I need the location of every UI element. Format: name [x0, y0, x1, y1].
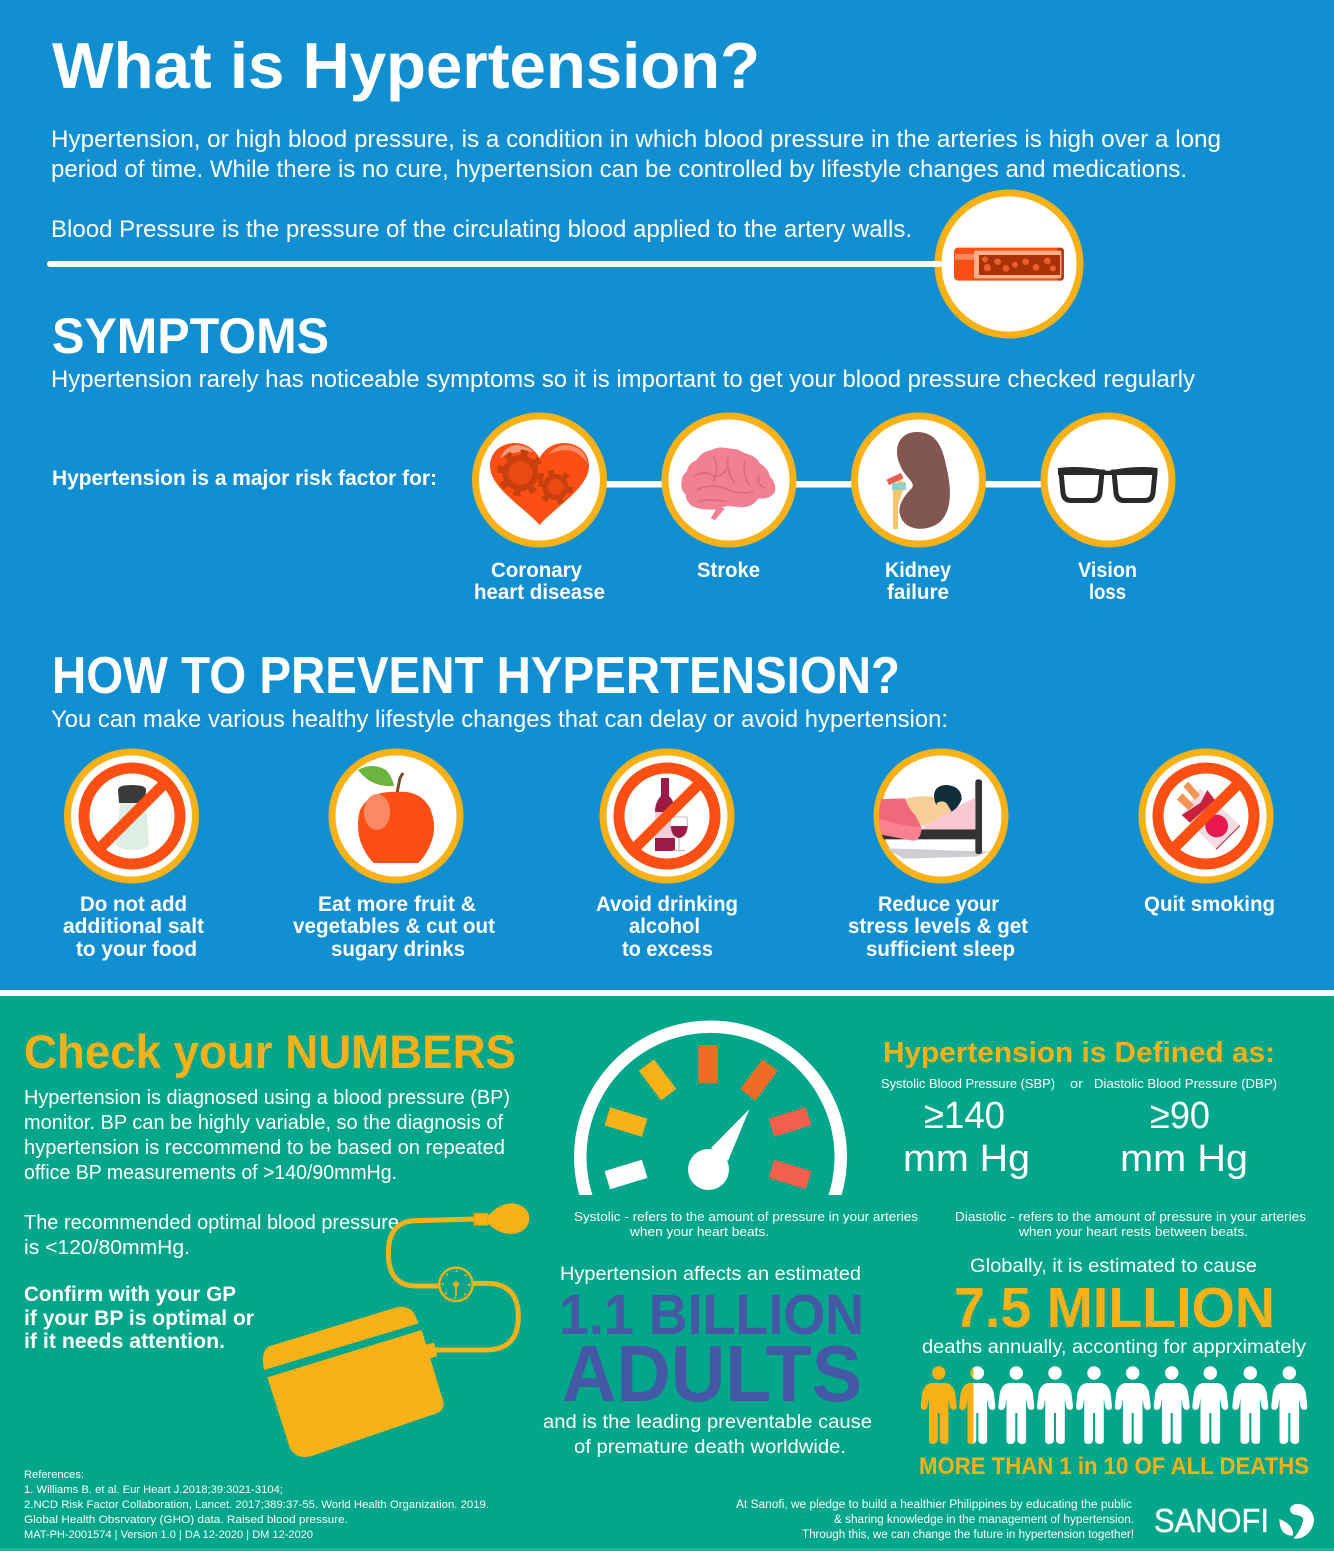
text: Sanofi pledge: & sharing knowledge in the management of hypertension.	[834, 1514, 1134, 1526]
text: Sanofi pledge: At Sanofi, we pledge to build a healthier Philippines by educating the public	[736, 1499, 1132, 1511]
labels: prevention tips: stress levels & get	[848, 915, 1028, 938]
definition values: Systolic Blood Pressure (SBP)	[881, 1077, 1055, 1091]
heading: defined as: Hypertension is Defined as:	[883, 1037, 1275, 1069]
text: diastolic description: Diastolic - refers to the amount of pressure in your arteries	[955, 1209, 1307, 1224]
definition values: mm Hg	[903, 1138, 1030, 1180]
text block: definition	[51, 126, 1221, 243]
panel: check your numbers	[0, 996, 1334, 1551]
labels: risk factors: Coronary	[491, 559, 582, 582]
references	[24, 1469, 489, 1541]
labels: prevention tips: Eat more fruit &	[318, 893, 476, 916]
definition values: Diastolic Blood Pressure (DBP)	[1094, 1077, 1277, 1091]
labels: risk factors: heart disease	[474, 581, 605, 604]
icon: sleep	[877, 752, 1005, 880]
references: Global Health Obsrvatory (GHO) data. Raised blood pressure.	[24, 1514, 348, 1526]
definition values	[881, 1077, 1277, 1180]
icon: no smoking	[1142, 752, 1270, 880]
stat: 7.5 million deaths: deaths annually, acconting for apprximately	[922, 1336, 1306, 1358]
text block: confirm with GP: if it needs attention.	[24, 1330, 225, 1353]
text block: diagnosis: Hypertension is diagnosed using a blood pressure (BP)	[24, 1086, 510, 1109]
icon: blood pressure cuff	[263, 1203, 529, 1457]
icon: apple	[332, 752, 460, 880]
heading: check your numbers: Check your NUMBERS	[24, 1025, 516, 1078]
connector between risk icons	[600, 481, 1045, 488]
text block: definition: Blood Pressure is the pressure of the circulating blood applied to the artery walls.	[51, 216, 912, 243]
icon: no alcohol	[603, 752, 731, 880]
labels: prevention tips: to your food	[76, 938, 197, 961]
labels: risk factors: Stroke	[697, 559, 760, 582]
definition values: ≥90	[1150, 1095, 1210, 1137]
text block: confirm with GP	[24, 1283, 254, 1353]
chart: gauge	[574, 1020, 847, 1195]
text block: diagnosis: hypertension is reccommend to be based on repeated	[24, 1136, 505, 1159]
stat: 1.1 billion adults	[543, 1263, 872, 1458]
definition values: mm Hg	[1120, 1138, 1248, 1180]
text block: diagnosis: is <120/80mmHg.	[24, 1236, 190, 1259]
heading: symptoms: SYMPTOMS	[52, 308, 329, 364]
labels: risk factors: Kidney	[885, 559, 951, 582]
text: systolic description: when your heart beats.	[629, 1224, 769, 1239]
text block: diagnosis	[24, 1086, 510, 1259]
connector line to artery icon	[47, 261, 942, 267]
labels: risk factors	[474, 559, 1137, 604]
text block: definition: period of time. While there is no cure, hypertension can be controlled by lifestyle changes and medications.	[51, 156, 1187, 183]
labels: prevention tips: Reduce your	[878, 893, 999, 916]
stat: 7.5 million deaths: 7.5 MILLION	[954, 1276, 1275, 1340]
text: risk factor lead-in: Hypertension is a major risk factor for:	[52, 467, 437, 490]
text: Sanofi pledge	[736, 1499, 1134, 1541]
title: What is Hypertension?	[52, 29, 760, 102]
stat: 1.1 billion adults: and is the leading preventable cause	[543, 1411, 872, 1433]
labels: prevention tips: Avoid drinking	[596, 893, 738, 916]
panel: what is hypertension, symptoms and prevention	[0, 0, 1334, 990]
labels: risk factors: failure	[887, 581, 949, 604]
references: References:	[24, 1469, 84, 1481]
labels: risk factors: loss	[1089, 581, 1126, 604]
text: symptoms intro: Hypertension rarely has noticeable symptoms so it is important to get your blood pressure checked regularly	[51, 366, 1195, 393]
pictogram: 1 in 10 people	[921, 1366, 1307, 1444]
text: diastolic description: when your heart rests between beats.	[1018, 1224, 1248, 1239]
labels: prevention tips: to excess	[622, 938, 713, 961]
icon: glasses	[1044, 416, 1172, 544]
logo: Sanofi: SANOFI	[1154, 1502, 1269, 1539]
labels: prevention tips: additional salt	[63, 915, 204, 938]
text block: confirm with GP: Confirm with your GP	[24, 1283, 236, 1306]
stat: 7.5 million deaths	[922, 1255, 1306, 1358]
references: 1. Williams B. et al. Eur Heart J.2018;39:3021-3104;	[24, 1484, 283, 1496]
icon: coronary heart disease	[476, 416, 604, 544]
callout: more than 1 in 10: MORE THAN 1 in 10 OF ALL DEATHS	[919, 1453, 1309, 1480]
references: MAT-PH-2001574 | Version 1.0 | DA 12-2020 | DM 12-2020	[24, 1529, 313, 1541]
text: systolic description	[574, 1209, 919, 1239]
stat: 1.1 billion adults: ADULTS	[562, 1329, 862, 1418]
stat: 1.1 billion adults: Hypertension affects an estimated	[560, 1263, 861, 1285]
labels: prevention tips: sufficient sleep	[866, 938, 1015, 961]
text: prevention intro: You can make various healthy lifestyle changes that can delay or avoid hypertension:	[51, 706, 948, 733]
text: diastolic description	[955, 1209, 1307, 1239]
labels: prevention tips: Do not add	[80, 893, 187, 916]
labels: prevention tips: alcohol	[629, 915, 700, 938]
text block: diagnosis: The recommended optimal blood pressure	[24, 1211, 399, 1234]
labels: prevention tips: vegetables & cut out	[293, 915, 495, 938]
icon: artery	[938, 193, 1080, 335]
labels: prevention tips: Quit smoking	[1144, 893, 1275, 916]
text block: definition: Hypertension, or high blood pressure, is a condition in which blood pressure in the arteries is high over a long	[51, 126, 1221, 153]
labels: prevention tips	[63, 893, 1275, 961]
heading: how to prevent: HOW TO PREVENT HYPERTENSION?	[52, 647, 900, 705]
text: systolic description: Systolic - refers to the amount of pressure in your arteries	[574, 1209, 919, 1224]
text block: diagnosis: office BP measurements of >140/90mmHg.	[24, 1161, 397, 1184]
stat: 7.5 million deaths: Globally, it is estimated to cause	[970, 1255, 1257, 1277]
stat: 1.1 billion adults: 1.1 BILLION	[559, 1283, 864, 1347]
text block: diagnosis: monitor. BP can be highly variable, so the diagnosis of	[24, 1111, 503, 1134]
labels: prevention tips: sugary drinks	[331, 938, 465, 961]
icon: brain	[665, 416, 793, 544]
definition values: ≥140	[924, 1095, 1005, 1137]
definition values: or	[1070, 1077, 1083, 1091]
references: 2.NCD Risk Factor Collaboration, Lancet. 2017;389:37-55. World Health Organization. 2019.	[24, 1499, 489, 1511]
icon: kidney	[854, 416, 982, 544]
stat: 1.1 billion adults: of premature death worldwide.	[574, 1436, 846, 1458]
text: Sanofi pledge: Through this, we can change the future in hypertension together!	[802, 1529, 1134, 1541]
text block: confirm with GP: if your BP is optimal or	[24, 1307, 254, 1330]
labels: risk factors: Vision	[1078, 559, 1137, 582]
icon: no salt	[68, 752, 196, 880]
